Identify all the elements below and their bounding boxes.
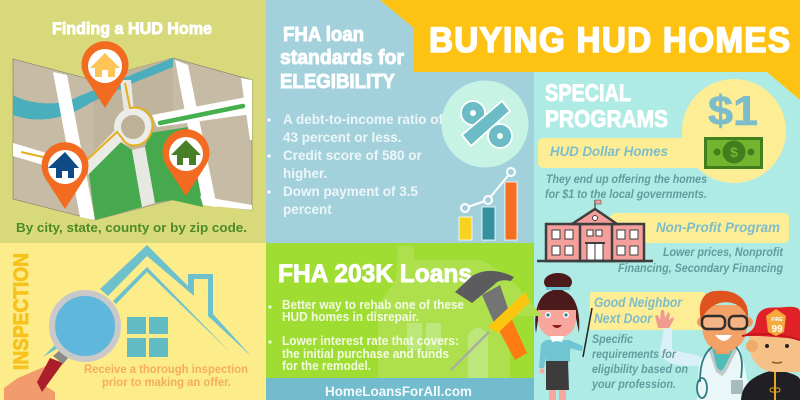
text: good neighbor description: your profession. — [591, 379, 676, 391]
icon: orange pin with yellow house — [81, 41, 128, 108]
illustration: firefighter: FIRE — [771, 317, 783, 323]
bullet list: eligibility criteria: higher. — [283, 166, 327, 181]
label: non-profit program: Non-Profit Program — [656, 220, 780, 235]
text: inspection description — [84, 364, 248, 389]
bullet list: eligibility criteria: Down payment of 3.5 — [283, 184, 419, 199]
icon: dollar bill: $ — [730, 144, 738, 160]
badge: one dollar — [682, 79, 786, 183]
panel: special programs — [534, 72, 800, 400]
icon: dollar bill — [704, 137, 763, 169]
text: non-profit description — [618, 247, 784, 275]
icon: hammer and screwdriver — [451, 271, 530, 370]
illustration: teacher — [535, 273, 592, 400]
panel: FHA 203K loans — [266, 243, 542, 378]
footer: website: HomeLoansForAll.com — [325, 383, 472, 399]
text: inspection description: Receive a thorough inspection — [84, 364, 248, 376]
panel: inspection — [0, 243, 266, 400]
text: non-profit description: Lower prices, Nonprofit — [663, 247, 784, 259]
icon: orange pin with green house — [162, 129, 210, 196]
icon: magnifying glass in hand — [4, 293, 118, 400]
icon: house outline — [43, 245, 252, 357]
footer: website — [266, 378, 534, 400]
icon: school building — [537, 200, 653, 261]
text: HUD dollar homes description: They end up offering the homes — [546, 174, 707, 186]
banner: title — [380, 0, 800, 100]
heading: special programs: PROGRAMS — [545, 106, 668, 133]
caption: by city, state, county: By city, state, county or by zip code. — [16, 220, 247, 235]
bullet list: 203K benefits: the initial purchase and funds — [282, 347, 449, 361]
label: HUD dollar homes: HUD Dollar Homes — [550, 144, 668, 159]
heading: FHA 203K loans: FHA 203K Loans — [278, 260, 472, 288]
text: inspection description: prior to making an offer. — [102, 377, 231, 389]
text: non-profit description: Financing, Secondary Financing — [618, 263, 783, 275]
label: good neighbor next door: Next Door — [594, 311, 653, 326]
heading: FHA loan standards for eligibility: standards for — [280, 47, 404, 69]
illustration: doctor — [655, 291, 753, 400]
label: HUD dollar homes — [538, 138, 704, 168]
bullet list: eligibility criteria — [267, 112, 443, 217]
heading: inspection (vertical): INSPECTION — [10, 253, 33, 370]
bullet list: eligibility criteria: 43 percent or less. — [283, 130, 402, 145]
panel: FHA loan standards — [266, 0, 534, 243]
label: good neighbor next door — [590, 292, 705, 330]
text: good neighbor description: requirements for — [592, 349, 676, 361]
text: good neighbor description: Specific — [592, 334, 634, 346]
bullet list: eligibility criteria: percent — [283, 202, 332, 217]
heading: special programs — [545, 80, 668, 133]
label: non-profit program — [610, 213, 789, 243]
icon: percent badge — [442, 80, 528, 168]
heading: finding a HUD home: Finding a HUD Home — [52, 19, 212, 38]
badge: one dollar: $1 — [708, 87, 758, 134]
illustration: firefighter: 99 — [771, 324, 783, 335]
watermark: house — [370, 246, 542, 378]
bullet list: eligibility criteria: A debt-to-income ratio of — [283, 112, 443, 127]
title: buying HUD homes: BUYING HUD HOMES — [429, 21, 790, 60]
text: HUD dollar homes description: for $1 to the local governments. — [545, 189, 707, 201]
bullet list: 203K benefits: Better way to rehab one of these — [282, 298, 464, 312]
heading: special programs: SPECIAL — [545, 80, 631, 107]
bullet list: eligibility criteria: Credit score of 580 or — [283, 148, 423, 163]
bullet list: 203K benefits: Lower interest rate that covers: — [282, 334, 459, 348]
icon: orange pin with blue house — [41, 142, 88, 209]
text: good neighbor description — [591, 334, 688, 391]
heading: FHA loan standards for eligibility: ELEGIBILITY — [280, 71, 396, 93]
bullet list: 203K benefits: HUD homes in disrepair. — [282, 310, 419, 324]
chart: rising bars — [459, 168, 517, 240]
text: good neighbor description: eligibility based on — [592, 364, 688, 376]
heading: FHA loan standards for eligibility — [280, 24, 404, 93]
heading: FHA loan standards for eligibility: FHA loan — [283, 24, 364, 46]
map illustration — [13, 58, 252, 220]
illustration: firefighter — [741, 307, 800, 400]
bullet list: 203K benefits — [268, 298, 464, 373]
bullet list: 203K benefits: for the remodel. — [282, 359, 371, 373]
label: good neighbor next door: Good Neighbor — [594, 295, 683, 310]
text: HUD dollar homes description — [545, 174, 707, 201]
panel: finding a HUD home — [0, 0, 266, 243]
